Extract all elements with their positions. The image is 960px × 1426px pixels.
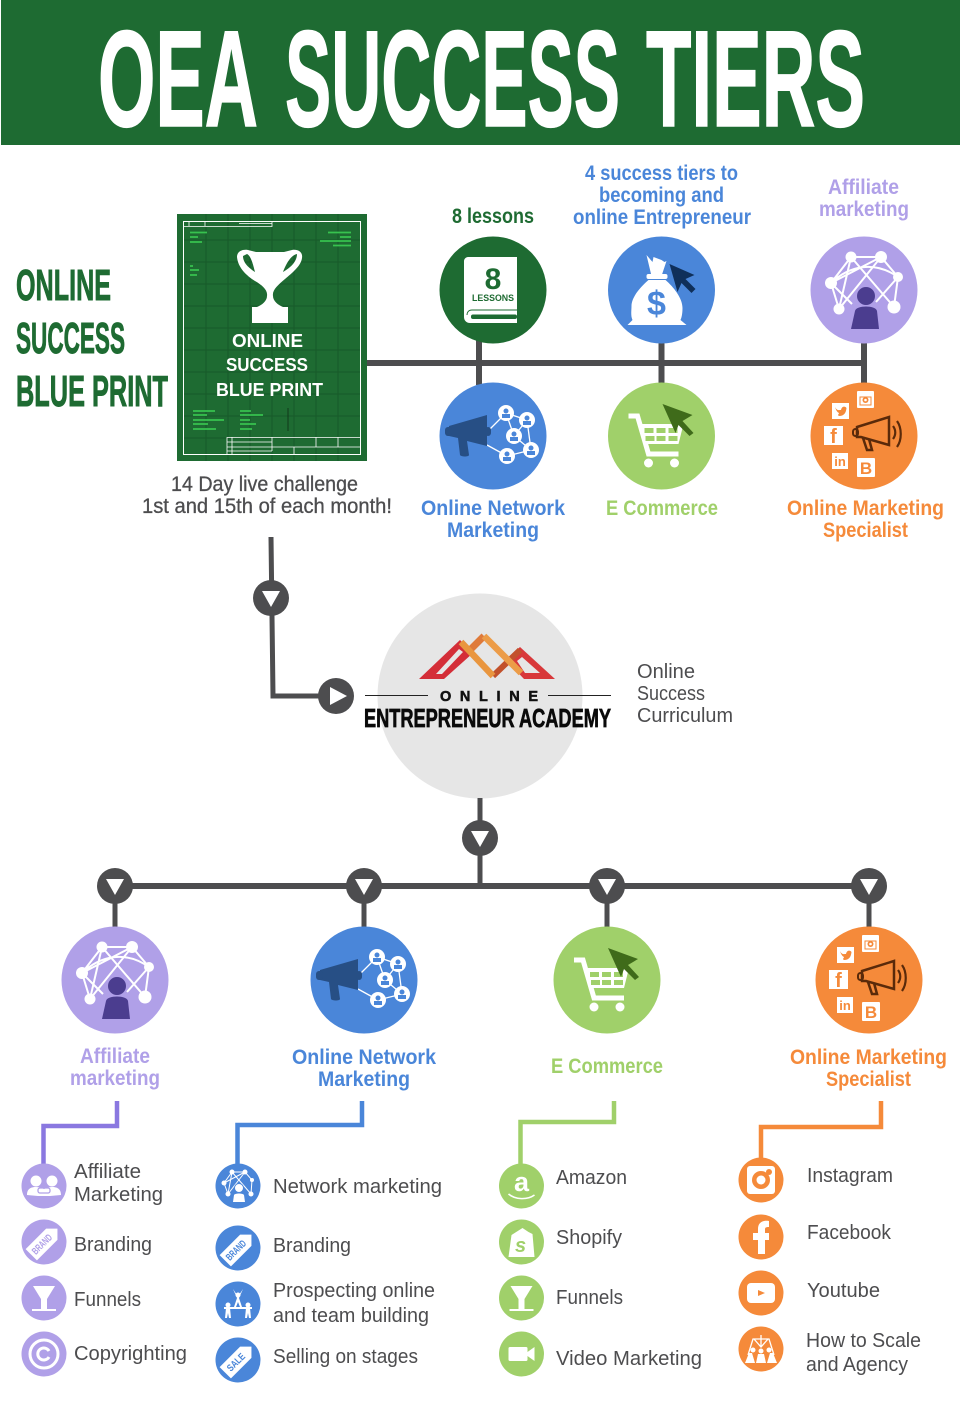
curriculum caption [637, 661, 733, 727]
affiliate list text: Affiliate [74, 1161, 141, 1183]
title banner: OEA [98, 3, 258, 156]
affiliate list text: Branding [74, 1234, 152, 1256]
label: online marketing specialist lower: Specialist [826, 1068, 911, 1091]
blueprint label: ONLINE [232, 330, 303, 351]
commerce list text: Shopify [556, 1227, 622, 1249]
affiliate list text: Copyrighting [74, 1343, 187, 1365]
affiliate list text: Marketing [74, 1184, 163, 1206]
network list text: Selling on stages [273, 1346, 418, 1368]
icon: handshake people [22, 1164, 66, 1208]
label: online marketing specialist top [787, 497, 944, 542]
icon: 8 lessons book: LESSONS [472, 293, 514, 303]
marketing list text: Instagram [807, 1165, 893, 1187]
icon: team building [216, 1282, 260, 1326]
marketing list text: Facebook [807, 1222, 892, 1244]
blueprint poster [177, 214, 367, 461]
icon: 8 lessons book: 8 [485, 263, 501, 296]
icon: online network marketing lower [310, 926, 418, 1034]
icon: online marketing specialist top: B [860, 459, 872, 478]
label: affiliate marketing top: marketing [819, 198, 909, 221]
label: online network marketing top: Online Network [421, 497, 565, 520]
marketing list text: How to Scale [806, 1330, 921, 1352]
panel: affiliate list [0, 1161, 187, 1376]
label: 4 success tiers: online Entrepreneur [573, 206, 751, 229]
icon: online marketing specialist top: in [834, 454, 846, 469]
icon: amazon [499, 1164, 544, 1208]
icon: brand tag [0, 1197, 89, 1287]
icon: trophy [237, 250, 302, 323]
academy logo [364, 636, 611, 733]
icon: funnel [22, 1276, 66, 1320]
flow arrow from blueprint to academy [253, 537, 354, 714]
label: online marketing specialist top: Specialist [823, 519, 908, 542]
heading: online success blue print: BLUE PRINT [16, 367, 168, 416]
blueprint label [216, 330, 324, 400]
icon: youtube [738, 1270, 784, 1316]
label: online network marketing top: Marketing [447, 519, 539, 542]
icon: affiliate network lower [62, 926, 168, 1034]
label: affiliate marketing top: Affiliate [828, 176, 899, 199]
icon: online marketing specialist lower: B [865, 1003, 877, 1022]
arrow node: affiliate [97, 868, 133, 904]
label: online network marketing top [421, 497, 565, 542]
network list text: Branding [273, 1235, 351, 1257]
panel: network list [193, 1164, 442, 1405]
challenge caption [142, 473, 392, 518]
blueprint label: SUCCESS [226, 354, 308, 375]
icon: money bag [608, 236, 715, 344]
heading: online success blue print: SUCCESS [16, 314, 125, 363]
commerce list text: Funnels [556, 1287, 623, 1309]
icon: sale tag [193, 1315, 283, 1405]
title banner: SUCCESS [285, 3, 620, 156]
affiliate list text [74, 1161, 187, 1365]
challenge caption: 14 Day live challenge [171, 473, 358, 496]
label: 8 lessons: 8 lessons [452, 205, 534, 228]
arrow node: marketing [851, 868, 887, 904]
icon: brand tag: BRAND [30, 1232, 55, 1257]
icon: sale tag: SALE [225, 1351, 248, 1374]
connector: orange [761, 1101, 881, 1160]
icon: online marketing specialist lower [816, 926, 922, 1034]
connector: top tier lines [367, 340, 867, 385]
icon: amazon: a [514, 1167, 530, 1197]
icon: affiliate network top [810, 236, 918, 344]
academy logo: ONLINE [440, 689, 538, 705]
curriculum caption: Curriculum [637, 705, 733, 727]
connector: blue [238, 1101, 362, 1166]
label: online marketing specialist lower: Online Marketing [790, 1046, 947, 1069]
curriculum caption: Success [637, 683, 705, 705]
network list text [273, 1176, 442, 1368]
icon: brand tag [193, 1203, 283, 1293]
label: online marketing specialist top: Online Marketing [787, 497, 944, 520]
label: affiliate marketing lower: Affiliate [80, 1045, 150, 1068]
icon: brand tag: BRAND [224, 1238, 249, 1263]
label: e commerce lower: E Commerce [551, 1055, 663, 1078]
icon: online marketing specialist top [810, 382, 918, 490]
icon: shopify: s [515, 1235, 526, 1257]
icon: 8 lessons book [440, 236, 546, 344]
label: affiliate marketing lower [70, 1045, 160, 1090]
label: affiliate marketing lower: marketing [70, 1067, 160, 1090]
icon: instagram [738, 1158, 784, 1202]
icon: network [216, 1164, 260, 1208]
icon: online network marketing top [440, 382, 546, 490]
heading: online success blue print [16, 261, 168, 416]
icon: e commerce cart top [608, 382, 715, 490]
challenge caption: 1st and 15th of each month! [142, 495, 392, 518]
arrow node: commerce [589, 868, 625, 904]
commerce list text: Amazon [556, 1167, 627, 1189]
icon: money bag: $ [647, 285, 666, 323]
connector: tier tree [112, 798, 872, 931]
label: e commerce top: E Commerce [606, 497, 718, 520]
network list text: Prospecting online [273, 1280, 435, 1302]
label: affiliate marketing top [819, 176, 909, 221]
label: online network marketing lower: Marketing [318, 1068, 410, 1091]
icon: e commerce cart lower [554, 926, 660, 1034]
icon: copyright [22, 1332, 66, 1376]
marketing list text: and Agency [806, 1354, 908, 1376]
commerce list text [556, 1167, 702, 1370]
academy logo: ENTREPRENEUR ACADEMY [364, 705, 611, 733]
icon: online marketing specialist lower: f [835, 970, 842, 992]
panel: commerce list [499, 1164, 702, 1376]
title banner [1, 0, 960, 156]
central circle [378, 594, 582, 798]
affiliate list text: Funnels [74, 1289, 141, 1311]
label: 4 success tiers: 4 success tiers to [585, 162, 738, 185]
blueprint label: BLUE PRINT [216, 379, 324, 400]
marketing list text: Youtube [807, 1280, 880, 1302]
icon: online marketing specialist top: f [830, 426, 837, 448]
icon: scale agency [738, 1326, 784, 1372]
connector: green [520, 1101, 614, 1166]
label: online network marketing lower [292, 1046, 436, 1091]
curriculum caption: Online [637, 661, 695, 683]
icon: funnel [499, 1276, 544, 1320]
arrow node: network [346, 868, 382, 904]
connector: purple [44, 1101, 117, 1166]
panel: marketing list [738, 1158, 921, 1376]
commerce list text: Video Marketing [556, 1348, 702, 1370]
marketing list text [806, 1165, 921, 1376]
arrow node: center [462, 820, 498, 856]
network list text: Network marketing [273, 1176, 442, 1198]
network list text: and team building [273, 1305, 429, 1327]
heading: online success blue print: ONLINE [16, 261, 111, 310]
icon: facebook [738, 1214, 784, 1260]
label: online marketing specialist lower [790, 1046, 947, 1091]
icon: online marketing specialist lower: in [839, 998, 851, 1013]
icon: video camera [499, 1332, 544, 1376]
label: 4 success tiers: becoming and [599, 184, 724, 207]
icon: shopify [499, 1220, 544, 1264]
label: 4 success tiers [573, 162, 751, 229]
label: online network marketing lower: Online Network [292, 1046, 436, 1069]
